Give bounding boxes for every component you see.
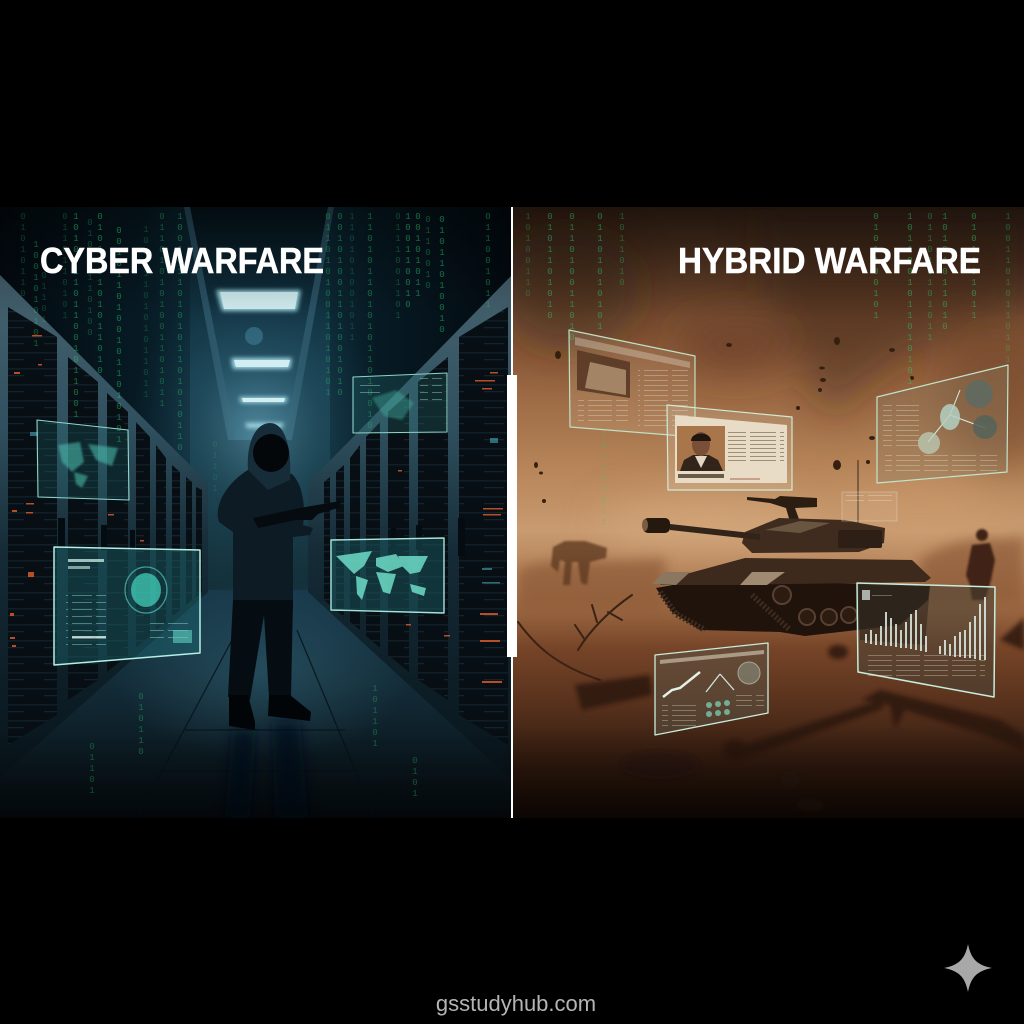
turret top highlight — [765, 521, 830, 533]
rifle — [253, 501, 341, 528]
matrix code rain: 0101 — [410, 756, 420, 800]
matrix code rain: 01011010010 — [437, 215, 447, 336]
track links — [660, 592, 790, 630]
matrix code rain — [18, 212, 493, 800]
ceiling lights — [216, 290, 301, 428]
hood — [248, 423, 290, 490]
matrix code rain: 0101100101 — [871, 212, 881, 322]
log and wreck — [575, 618, 1024, 811]
rack cyan indicators — [30, 432, 500, 584]
debris particles — [534, 337, 914, 503]
matrix code rain: 01011 — [246, 545, 256, 600]
matrix code rain: 101101 — [370, 684, 380, 750]
soldier silhouette — [966, 529, 995, 600]
torso and arms — [218, 470, 313, 610]
rack door handles — [58, 518, 465, 556]
smoke clouds — [513, 249, 1024, 557]
panel: cyber warfare scene — [0, 207, 512, 818]
matrix code rain: 1001010101 — [31, 240, 41, 350]
left fender — [652, 572, 690, 585]
server corridor backdrop — [0, 207, 511, 590]
matrix code rain: 1010110101011011 — [141, 225, 151, 401]
matrix code rain: 011010011010 — [567, 212, 577, 344]
floor tile lines — [172, 630, 348, 754]
matrix code rain: 00101011 — [413, 212, 423, 300]
hologram: faint data card — [842, 492, 897, 521]
matrix code rain: 1011010 — [617, 212, 627, 289]
fallen branches — [518, 595, 632, 680]
matrix code rain: 01010110100 — [85, 218, 95, 339]
heading: hybrid warfare: HYBRID WARFARE — [678, 240, 981, 281]
hull — [660, 558, 931, 585]
server racks right — [308, 275, 512, 780]
matrix code rain: 0110110101 — [60, 212, 70, 322]
icon: sparkle watermark — [944, 944, 992, 992]
matrix code rain: 011010101011 — [925, 212, 935, 344]
light core — [220, 292, 298, 402]
road wheels — [773, 586, 857, 625]
floor — [0, 590, 512, 818]
machine gun — [747, 496, 817, 519]
dusty sky and ground — [513, 207, 1024, 818]
vignette — [513, 207, 1024, 818]
footer website label: gsstudyhub.com — [436, 991, 596, 1016]
hologram: radar console lower left — [54, 547, 200, 665]
matrix code rain: 01101010101 — [595, 212, 605, 333]
turret stowage — [838, 530, 882, 548]
distant treeline — [518, 535, 1024, 610]
hull shadow and tracks — [656, 580, 930, 636]
hologram: news article — [569, 330, 695, 437]
matrix code rain: 010110 — [136, 692, 146, 758]
hologram: data map upper right — [353, 373, 447, 433]
panel: hybrid warfare scene — [500, 207, 1024, 818]
matrix code rain: 0110010 — [423, 215, 433, 292]
hologram: profile article — [667, 405, 792, 490]
matrix code rain: 011010101001101011 — [157, 212, 167, 410]
matrix code rain: 01101 — [210, 440, 220, 495]
matrix code rain: 110101001011 — [347, 212, 357, 344]
floor glow — [150, 610, 375, 740]
matrix code rain: 101101 — [39, 260, 49, 326]
matrix code rain: 00101001101001010 — [335, 212, 345, 399]
matrix code rain: 1011001011010101 — [905, 212, 915, 388]
walker silhouette — [551, 541, 607, 585]
matrix code rain: 011001011 — [483, 212, 493, 311]
matrix code rain: 0111001101 — [393, 212, 403, 322]
divider: thick centre bar — [507, 375, 517, 657]
matrix code rain: 00101101001011010101 — [114, 226, 124, 446]
heading: cyber warfare: CYBER WARFARE — [40, 240, 324, 281]
legs — [228, 600, 293, 700]
matrix code rain: 0101101011 — [969, 212, 979, 322]
matrix code rain: 101101011 — [599, 430, 609, 529]
matrix code rain: 01010110 — [18, 212, 28, 300]
right boot — [268, 695, 311, 721]
gun barrel — [670, 524, 760, 540]
hologram: dashboard — [655, 643, 768, 735]
matrix code rain: 10101011010 — [940, 212, 950, 333]
muzzle bore — [642, 519, 648, 531]
divider: thin centre line — [511, 207, 513, 818]
rack status LEDs — [10, 335, 503, 683]
matrix code rain: 010110101011010 — [95, 212, 105, 377]
hologram: world map upper left — [37, 420, 129, 500]
matrix code rain: 100110010 — [403, 212, 413, 311]
matrix code rain: 01101 — [87, 742, 97, 797]
right fender — [740, 572, 785, 585]
matrix code rain: 10110 — [280, 575, 290, 630]
left boot — [229, 695, 255, 730]
turret — [742, 518, 885, 553]
vignette — [0, 207, 512, 818]
matrix code rain — [523, 212, 1013, 529]
ceiling lens — [245, 327, 263, 345]
tank — [642, 460, 931, 636]
boot reflections — [228, 718, 305, 766]
face shadow — [253, 434, 289, 472]
matrix code rain: 1001011010101101010110 — [175, 212, 185, 454]
matrix code rain: 10011010110101 — [1003, 212, 1013, 366]
muzzle brake — [643, 518, 670, 533]
hologram: world map lower right — [331, 538, 444, 613]
matrix code rain: 01101010011010101 — [323, 212, 333, 399]
server racks left — [0, 275, 208, 778]
matrix code rain: 1010011011001011001 — [71, 212, 81, 421]
antenna — [858, 460, 859, 523]
hologram: bar chart — [857, 583, 995, 697]
matrix code rain: 11010110101011010010 — [365, 212, 375, 432]
figure: hooded hacker — [218, 423, 341, 730]
matrix code rain: 10100110 — [523, 212, 533, 300]
hologram: network graph — [877, 365, 1008, 483]
matrix code rain: 0101101010 — [545, 212, 555, 322]
portrait — [680, 432, 723, 471]
